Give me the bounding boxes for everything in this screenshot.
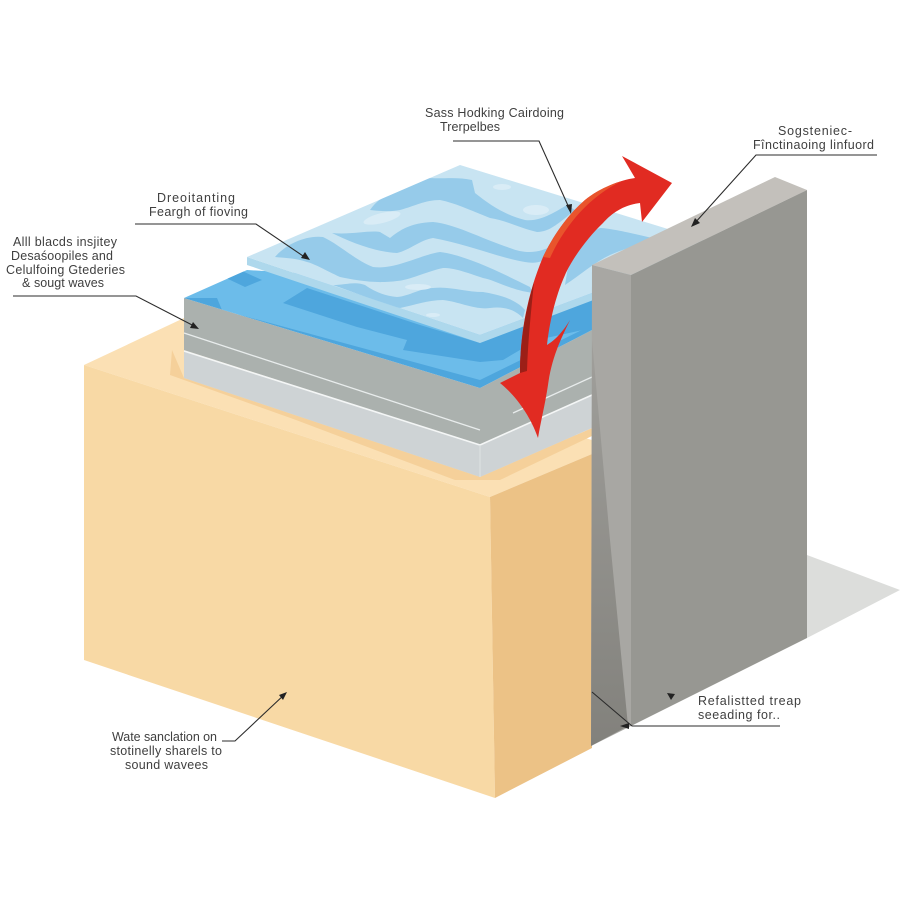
label: far left: Celulfoing Gtederies (6, 263, 125, 277)
label: top centre: Trerpelbes (440, 120, 500, 134)
wave band right of arrow (565, 228, 650, 285)
ice wave layer (247, 165, 720, 335)
label: bottom right: seeading for.. (698, 708, 780, 722)
pale bottom layer (184, 350, 592, 477)
label: top centre (425, 106, 572, 214)
leader arrow (13, 296, 199, 329)
layered slabs (184, 165, 720, 477)
leader arrow (691, 155, 877, 227)
wave band C (275, 237, 533, 293)
red double-headed arrow (500, 156, 672, 438)
infographic diagram (6, 108, 900, 798)
sand contact shadow (170, 350, 592, 480)
leader arrow (135, 224, 310, 260)
arrow orange highlight (543, 181, 622, 258)
wave band D (333, 283, 525, 318)
wave band B (332, 222, 557, 263)
label: bottom right: Refalistted treap (698, 694, 801, 708)
label: bottom left: Wate sanclation on (112, 730, 217, 744)
label: top centre: Sass Hodking Cairdoing (425, 106, 564, 120)
wall front face (631, 190, 807, 726)
layer highlights (184, 333, 480, 430)
label: far left: Desaśoopiles and (11, 249, 113, 263)
arrow body and heads (500, 156, 672, 438)
wall top face (592, 177, 807, 275)
label: bottom left: sound wavees (125, 758, 208, 772)
label: far left (6, 235, 199, 329)
label: top right: Fînctinaoing linfuord (753, 138, 874, 152)
label: far left: & sougt waves (22, 276, 104, 290)
wave band A (370, 177, 575, 232)
label: bottom left: stotinelly sharels to (110, 744, 222, 758)
leader arrow (453, 141, 572, 214)
ice edge (247, 245, 720, 343)
leader arrow (592, 692, 780, 729)
blue water layer (184, 270, 592, 388)
floor shadow (807, 555, 900, 638)
sand top face (84, 318, 592, 497)
label: far left: Alll blacds insjitey (13, 235, 118, 249)
arrow dark inner edge (520, 282, 534, 373)
sand front face (84, 365, 495, 798)
wall (591, 177, 807, 746)
label: upper left (135, 191, 310, 260)
leader arrow (222, 692, 287, 741)
label: bottom right (592, 692, 801, 729)
label: upper left: Dreoitanting (157, 191, 235, 205)
label: top right: Sogsteniec- (778, 124, 852, 138)
grey middle layer (184, 298, 592, 445)
sand right face (490, 454, 592, 798)
label: upper left: Feargh of fioving (149, 205, 248, 219)
ice highlights (362, 184, 549, 317)
label: top right (691, 124, 877, 227)
label: bottom left (110, 692, 287, 772)
sand block (84, 318, 592, 798)
wall side face (591, 265, 631, 746)
